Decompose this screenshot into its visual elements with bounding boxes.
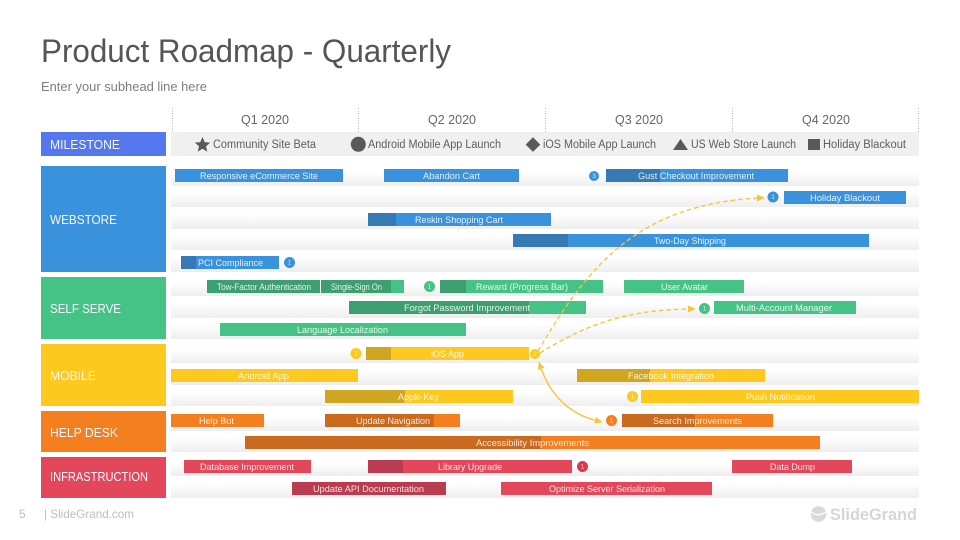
bar: abandon cart — [384, 169, 519, 182]
bar: responsive ecommerce site: Responsive eCommerce Site — [200, 170, 318, 181]
bar: abandon cart: Abandon Cart — [423, 170, 480, 181]
bar: database improvement: Database Improvement — [200, 461, 294, 472]
badge: 1: 1 — [288, 261, 292, 267]
bar: reskin shopping cart — [368, 213, 551, 226]
bar: ios app: iOS App — [431, 348, 464, 359]
category: webstore — [41, 166, 166, 272]
bar: ios app — [366, 347, 529, 360]
bar: responsive ecommerce site — [175, 169, 343, 182]
bar: help bot: Help Bot — [199, 415, 234, 426]
bar: pci compliance — [181, 256, 279, 269]
bar: facebook integration — [577, 369, 765, 382]
badge: 1: 1 — [771, 195, 775, 201]
row bands — [171, 166, 919, 498]
bar: holiday blackout: Holiday Blackout — [810, 192, 880, 203]
bar: user avatar — [624, 280, 744, 293]
milestone: holiday blackout: Holiday Blackout — [823, 139, 907, 151]
bar: database improvement — [184, 460, 311, 473]
bar: multi-account manager: Multi-Account Manager — [736, 302, 832, 313]
milestone: ios launch: iOS Mobile App Launch — [543, 139, 656, 151]
category: mobile: MOBILE — [50, 368, 96, 383]
quarter header: Q2 2020 — [428, 112, 476, 127]
bar: search improvements — [622, 414, 773, 427]
bar: two-day shipping: Two-Day Shipping — [654, 235, 726, 246]
badge: 1 — [350, 348, 362, 359]
category: milestone — [41, 132, 166, 156]
title: Product Roadmap - Quarterly — [41, 33, 451, 69]
bar: update api documentation — [292, 482, 446, 495]
bar: accessibility improvements: Accessibility Improvements — [476, 437, 589, 448]
icon: diamond — [526, 137, 540, 152]
bar: android app — [171, 369, 358, 382]
bar: data dump: Data Dump — [770, 461, 815, 472]
badge: 1: 1 — [703, 307, 707, 313]
logo: slidegrand: SlideGrand — [830, 506, 917, 524]
bar: language localization — [220, 323, 466, 336]
category: infrastruction: INFRASTRUCTION — [50, 469, 148, 484]
quarter header: Q3 2020 — [615, 112, 663, 127]
arrow: ios app to search improvements — [541, 368, 596, 420]
bar: apple key: Apple Key — [398, 391, 439, 402]
bar: pci compliance: PCI Compliance — [198, 257, 263, 268]
bar: reward progress bar: Reward (Progress Bar) — [476, 281, 568, 292]
bar: tow-factor authentication: Tow-Factor Authentication — [217, 281, 311, 292]
milestone: us web store launch: US Web Store Launch — [691, 139, 796, 151]
category: infrastruction — [41, 457, 166, 498]
milestone: community site beta: Community Site Beta — [213, 139, 317, 151]
badge: 1 — [284, 257, 295, 268]
category: milestone: MILESTONE — [50, 137, 120, 152]
bar: forgot password improvement: Forgot Password Improvement — [404, 302, 530, 313]
bar: two-day shipping — [513, 234, 869, 247]
milestone: android launch: Android Mobile App Launch — [368, 139, 501, 151]
icon: star — [195, 137, 210, 152]
bar: gust checkout improvement — [606, 169, 788, 182]
bar: push notification — [641, 390, 919, 403]
bar: optimize server serialization: Optimize Server Serialization — [549, 483, 665, 494]
subhead: Enter your subhead line here — [41, 79, 207, 94]
bar: apple key — [325, 390, 513, 403]
bar: update navigation: Update Navigation — [356, 415, 430, 426]
icon: square — [808, 139, 820, 150]
bar: reskin shopping cart: Reskin Shopping Cart — [415, 214, 503, 225]
category: help desk — [41, 411, 166, 452]
bar: single-sign on: Single-Sign On — [331, 281, 382, 292]
bar: forgot password improvement — [349, 301, 586, 314]
bar: update api documentation: Update API Documentation — [313, 483, 424, 494]
bar: user avatar: User Avatar — [661, 281, 708, 292]
bar: data dump — [732, 460, 852, 473]
bar: reward progress bar — [440, 280, 603, 293]
badge: 3 — [589, 171, 599, 181]
quarter header — [172, 108, 918, 132]
badge: 1: 1 — [428, 285, 432, 291]
badge: 1 — [768, 192, 778, 202]
category: mobile — [41, 344, 166, 406]
icon: circle — [351, 137, 366, 152]
bar: single-sign on — [321, 280, 404, 293]
badge: 2: 2 — [533, 352, 537, 358]
bar: library upgrade — [368, 460, 572, 473]
badge: 1: 1 — [631, 395, 635, 401]
bar: gust checkout improvement: Gust Checkout Improvement — [638, 170, 754, 181]
quarter header: Q1 2020 — [241, 112, 289, 127]
category: webstore: WEBSTORE — [50, 212, 117, 227]
footer site name: | SlideGrand.com — [44, 507, 134, 521]
bar: language localization: Language Localization — [297, 324, 388, 335]
badge: 1 — [577, 461, 588, 472]
arrow: ios app to multi-account manager — [540, 309, 689, 353]
badge: 1 — [699, 303, 710, 314]
bar: holiday blackout — [784, 191, 906, 204]
badge: 1 — [424, 281, 435, 292]
category: help desk: HELP DESK — [50, 425, 118, 440]
milestone row — [171, 132, 919, 156]
badge: 1: 1 — [610, 419, 614, 425]
bar: accessibility improvements — [245, 436, 820, 449]
badge: 1 — [627, 391, 638, 402]
bar: library upgrade: Library Upgrade — [438, 461, 502, 472]
bar: android app: Android App — [238, 370, 289, 381]
bar: update navigation — [325, 414, 460, 427]
arrow: ios app to holiday blackout — [538, 198, 758, 351]
bar: multi-account manager — [714, 301, 856, 314]
quarter header: Q4 2020 — [802, 112, 850, 127]
badge: 3: 3 — [592, 174, 596, 180]
category: self serve: SELF SERVE — [50, 301, 121, 316]
icon: triangle — [673, 139, 688, 150]
bar: push notification: Push Notification — [746, 391, 815, 402]
page number: 5 — [19, 507, 26, 521]
badge: 1: 1 — [354, 352, 358, 358]
bar: facebook integration: Facebook Integration — [628, 370, 714, 381]
category: self serve — [41, 277, 166, 339]
badge: 1 — [606, 415, 617, 426]
bar: help bot — [171, 414, 264, 427]
bar: optimize server serialization — [501, 482, 712, 495]
bar: search improvements: Search Improvements — [653, 415, 742, 426]
badge: 1: 1 — [581, 465, 585, 471]
badge: 2 — [530, 349, 540, 359]
